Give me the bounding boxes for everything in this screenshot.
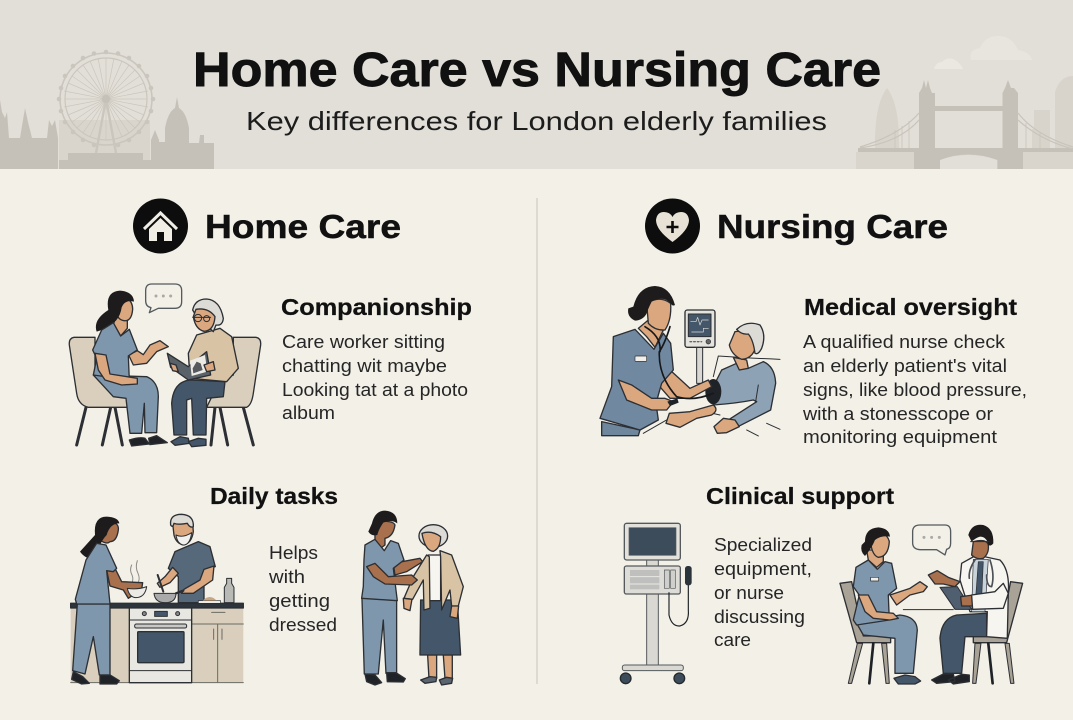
table line xyxy=(903,608,953,611)
description: chatting wit maybe xyxy=(282,355,447,376)
illustration: Tower Bridge, clouds and city buildings xyxy=(856,36,1073,169)
bottle xyxy=(224,578,234,603)
heading: Medical oversight: Medical oversight xyxy=(804,294,1017,320)
heading: Home Care: Home Care xyxy=(205,208,401,245)
heading: Companionship: Companionship xyxy=(281,294,472,320)
icon: house in black circle xyxy=(133,198,188,254)
clinical support description: Specialized xyxy=(714,534,812,555)
heading: Daily tasks: Daily tasks xyxy=(210,483,338,509)
description: monitoring equipment xyxy=(803,426,997,447)
clinical support description xyxy=(714,534,812,650)
right armchair xyxy=(207,337,261,445)
icon: heart with cross in black circle xyxy=(645,198,700,254)
nurse figure xyxy=(600,286,713,436)
title: Home Care vs Nursing Care xyxy=(193,44,881,97)
illustration: wheeled medical monitor xyxy=(620,523,692,684)
monitor on stand xyxy=(685,310,715,383)
speech bubble xyxy=(913,525,951,555)
illustration: carer chatting with elderly woman xyxy=(69,284,261,447)
description xyxy=(282,331,468,423)
clinical support description: discussing xyxy=(714,606,805,627)
divider between columns xyxy=(536,198,538,684)
description: with a stonesscope or xyxy=(802,403,993,424)
panel: nursing care xyxy=(600,198,1027,684)
carer figure standing xyxy=(362,511,423,685)
illustration: London skyline with wheel and dome xyxy=(0,50,214,169)
heading: Clinical support: Clinical support xyxy=(706,483,894,509)
elderly man figure xyxy=(154,514,221,603)
right chair xyxy=(973,582,1023,683)
speech bubble xyxy=(146,284,182,313)
daily tasks description: dressed xyxy=(269,614,337,635)
description: an elderly patient's vital xyxy=(803,355,1007,376)
daily tasks description: Helps xyxy=(269,542,318,563)
medical oversight text block xyxy=(802,294,1027,447)
elderly woman figure xyxy=(167,299,238,447)
left armchair xyxy=(69,337,130,445)
carer arm on elderly woman's sleeve xyxy=(367,563,417,585)
clinical support description: equipment, xyxy=(714,558,812,579)
left chair xyxy=(840,582,891,683)
patient in bed xyxy=(643,323,780,436)
description: Looking tat at a photo xyxy=(282,379,468,400)
illustration: carer helping elderly woman dress xyxy=(362,511,463,685)
steam xyxy=(131,561,139,584)
description: album xyxy=(282,402,335,423)
subtitle: Key differences for London elderly families xyxy=(246,106,827,136)
clinical support description: or nurse xyxy=(714,582,784,603)
elderly woman figure standing xyxy=(403,525,463,685)
blood pressure cuff xyxy=(705,379,721,404)
daily tasks description xyxy=(268,542,337,635)
description: signs, like blood pressure, xyxy=(803,379,1027,400)
carer figure at counter xyxy=(72,517,147,684)
daily tasks description: getting xyxy=(269,590,330,611)
daily tasks description: with xyxy=(268,566,305,587)
description: Care worker sitting xyxy=(282,331,445,352)
illustration: nurse talking with doctor xyxy=(840,525,1023,684)
header banner xyxy=(0,0,1073,169)
clinical support description: care xyxy=(714,629,751,650)
illustration: nurse checking patient's vital signs xyxy=(600,286,780,436)
doctor seated xyxy=(928,525,1009,684)
carer figure xyxy=(93,291,168,446)
nurse seated xyxy=(853,527,927,684)
panel: home care xyxy=(69,198,472,685)
illustration: kitchen scene with carer and elderly man xyxy=(71,514,243,684)
kitchen units and oven xyxy=(71,603,243,683)
companionship text block xyxy=(281,294,472,423)
heading: Nursing Care: Nursing Care xyxy=(717,208,948,245)
description: A qualified nurse check xyxy=(803,331,1006,352)
description xyxy=(802,331,1027,447)
